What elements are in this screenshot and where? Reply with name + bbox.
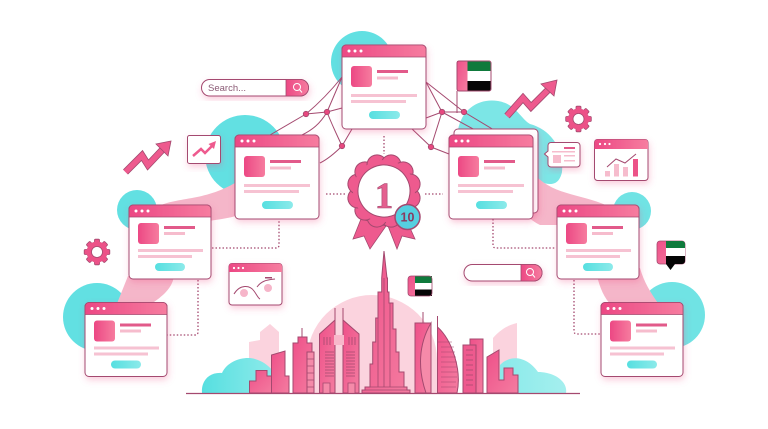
window: lower right xyxy=(601,302,683,376)
chart window xyxy=(594,140,648,180)
tower with cells xyxy=(293,328,314,393)
top flag on pole xyxy=(457,61,491,113)
icon: gear left xyxy=(84,239,110,265)
rising arrow: left xyxy=(126,141,171,172)
speech card xyxy=(544,142,580,167)
window back sheet xyxy=(454,129,538,213)
search bar with text: Search... xyxy=(208,83,246,94)
window: middle left xyxy=(129,205,211,279)
stepped slanted building xyxy=(487,350,518,393)
network nodes xyxy=(303,109,467,150)
window: top centre xyxy=(342,45,426,129)
search bar with text xyxy=(202,80,309,96)
skyline xyxy=(186,251,580,394)
award badge with rank 1 xyxy=(339,146,429,249)
curved tower xyxy=(415,312,431,393)
number ten seal: 10 xyxy=(401,210,414,224)
teal and pink background blobs xyxy=(63,31,705,351)
rising arrow: right xyxy=(507,80,557,116)
window: upper left xyxy=(235,135,319,219)
clouds xyxy=(202,358,272,393)
search bar empty xyxy=(464,264,542,281)
paired tower xyxy=(463,339,483,393)
ribbon tails xyxy=(353,219,415,249)
rosette xyxy=(339,146,429,236)
sail tower xyxy=(438,316,458,393)
icon: gear right xyxy=(566,106,591,132)
number one: 1 xyxy=(375,176,393,217)
twin towers xyxy=(320,308,359,393)
window: middle right xyxy=(557,205,639,279)
small chart card xyxy=(188,136,220,164)
ground line xyxy=(186,392,580,394)
window: upper right xyxy=(449,135,533,219)
small flag xyxy=(408,276,432,296)
small graph window xyxy=(229,264,282,305)
stepped building xyxy=(250,370,272,393)
slanted building xyxy=(272,351,289,393)
pale backdrop xyxy=(249,295,517,393)
burj tower xyxy=(362,251,410,393)
speech bubble flag xyxy=(657,241,685,270)
dotted connectors xyxy=(167,136,601,335)
network lines xyxy=(270,77,494,163)
window: lower left xyxy=(85,302,167,376)
